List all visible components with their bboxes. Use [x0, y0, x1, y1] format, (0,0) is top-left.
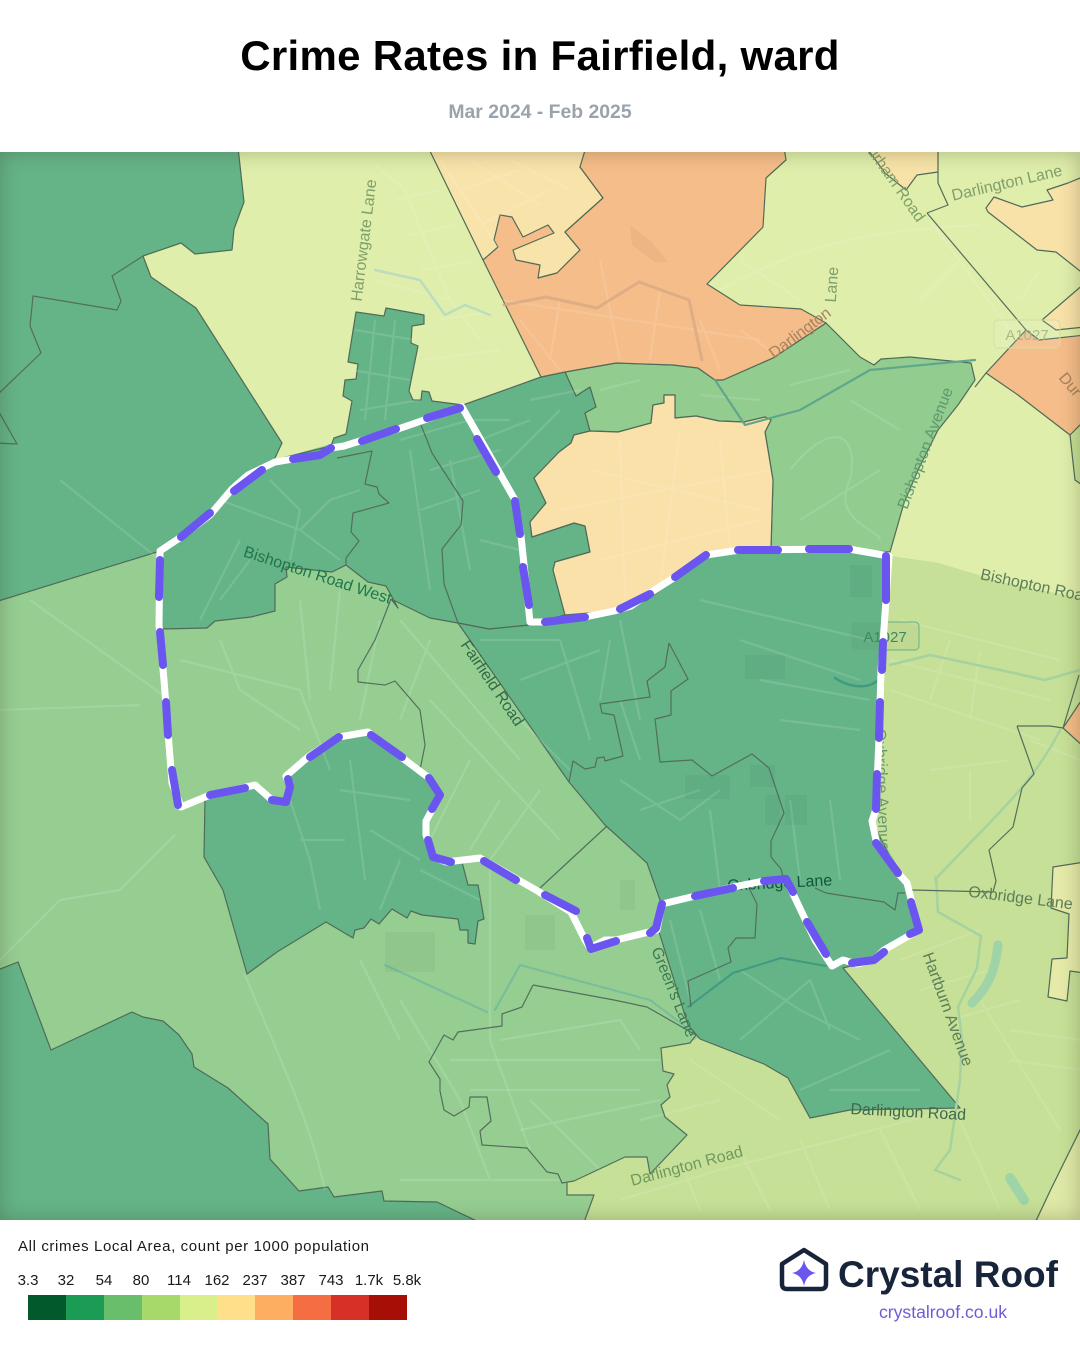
legend tick labels: 80 — [133, 1272, 149, 1289]
logo wordmark: Crystal Roof — [838, 1254, 1058, 1295]
watercourses — [375, 270, 1080, 1200]
faint land-use blocks — [385, 225, 872, 972]
label: Darlington orange: Darlington — [766, 305, 835, 362]
map areas — [0, 147, 1080, 1225]
label: Hartburn Avenue: Hartburn Avenue — [919, 950, 976, 1069]
area: east cream small — [1042, 283, 1080, 330]
legend tick labels — [18, 1272, 422, 1289]
map edge vignette — [0, 152, 1080, 1220]
legend tick labels: 5.8k — [393, 1272, 421, 1289]
ward boundary dashed outline — [159, 407, 919, 966]
legend tick labels: 3.3 — [18, 1272, 38, 1289]
legend colour scale — [28, 1295, 407, 1320]
area: north pale band — [143, 147, 1080, 600]
legend tick labels: 162 — [204, 1272, 230, 1289]
area: east peach — [986, 330, 1080, 440]
area: central cream high rate — [530, 395, 773, 615]
legend — [18, 1238, 422, 1320]
label: Bishopton Road West: Bishopton Road West — [241, 544, 394, 608]
area: north-east cream top — [866, 147, 938, 190]
area: dark green south of Bishopton Road and east ward — [458, 549, 960, 1118]
choropleth map — [0, 152, 1080, 1220]
label: Greens Lane: Green's Lane — [647, 945, 699, 1040]
area: east of ward — [840, 556, 1080, 1225]
legend tick labels: 1.7k — [355, 1272, 383, 1289]
area: east edge peach sliver — [1063, 695, 1080, 748]
road sign A1027 east — [994, 320, 1060, 348]
road sign A1027 centre: A1027 — [863, 629, 907, 646]
label: Oxbridge Lane centre: Oxbridge Lane — [727, 872, 833, 895]
road sign A1027 east: A1027 — [1005, 327, 1049, 344]
label: Fairfield Road: Fairfield Road — [457, 637, 527, 730]
streets — [0, 160, 1080, 1210]
website url: crystalroof.co.uk — [879, 1302, 1007, 1322]
area: south east pale corner — [1034, 1120, 1080, 1225]
area: east pale block — [1048, 862, 1080, 1001]
legend tick labels: 387 — [280, 1272, 306, 1289]
area: north-east mid green band — [565, 323, 975, 552]
internal area boundaries — [0, 172, 1079, 1225]
label: Bishopton Avenue: Bishopton Avenue — [895, 385, 957, 512]
area: east cream — [986, 176, 1080, 275]
label: Darlington Lane north east: Darlington Lane — [950, 163, 1064, 205]
title: Crime Rates in Fairfield, ward — [240, 32, 840, 79]
date range subtitle: Mar 2024 - Feb 2025 — [448, 101, 632, 123]
area: dark green south-west corner — [0, 962, 485, 1225]
area: dark green northern protrusion and ward north — [160, 308, 596, 629]
label: Harrowgate Lane: Harrowgate Lane — [349, 178, 380, 302]
label: Oxbridge Avenue: Oxbridge Avenue — [871, 728, 892, 851]
label: Darlington Road east: Darlington Road — [850, 1101, 966, 1124]
area: dark green south-west ward — [204, 732, 484, 974]
area: peach north — [483, 147, 826, 380]
area: north-west dark green — [0, 147, 282, 602]
label: Oxbridge Lane east: Oxbridge Lane — [967, 884, 1074, 913]
label: Darlington Road south: Darlington Road — [629, 1143, 745, 1190]
legend tick labels: 743 — [318, 1272, 344, 1289]
road labels — [241, 143, 1080, 1190]
area: south light green — [567, 1037, 1050, 1225]
legend tick labels: 54 — [96, 1272, 112, 1289]
legend tick labels: 237 — [242, 1272, 268, 1289]
legend tick labels: 114 — [167, 1272, 191, 1289]
label: Lane: Lane — [823, 266, 842, 303]
road sign A1027 centre — [851, 622, 919, 650]
legend title: All crimes Local Area, count per 1000 population — [18, 1238, 370, 1255]
legend tick labels: 32 — [58, 1272, 74, 1289]
logo icon: house with star — [780, 1248, 828, 1292]
area: north cream — [428, 147, 603, 278]
area: east edge sliver — [1070, 420, 1080, 487]
